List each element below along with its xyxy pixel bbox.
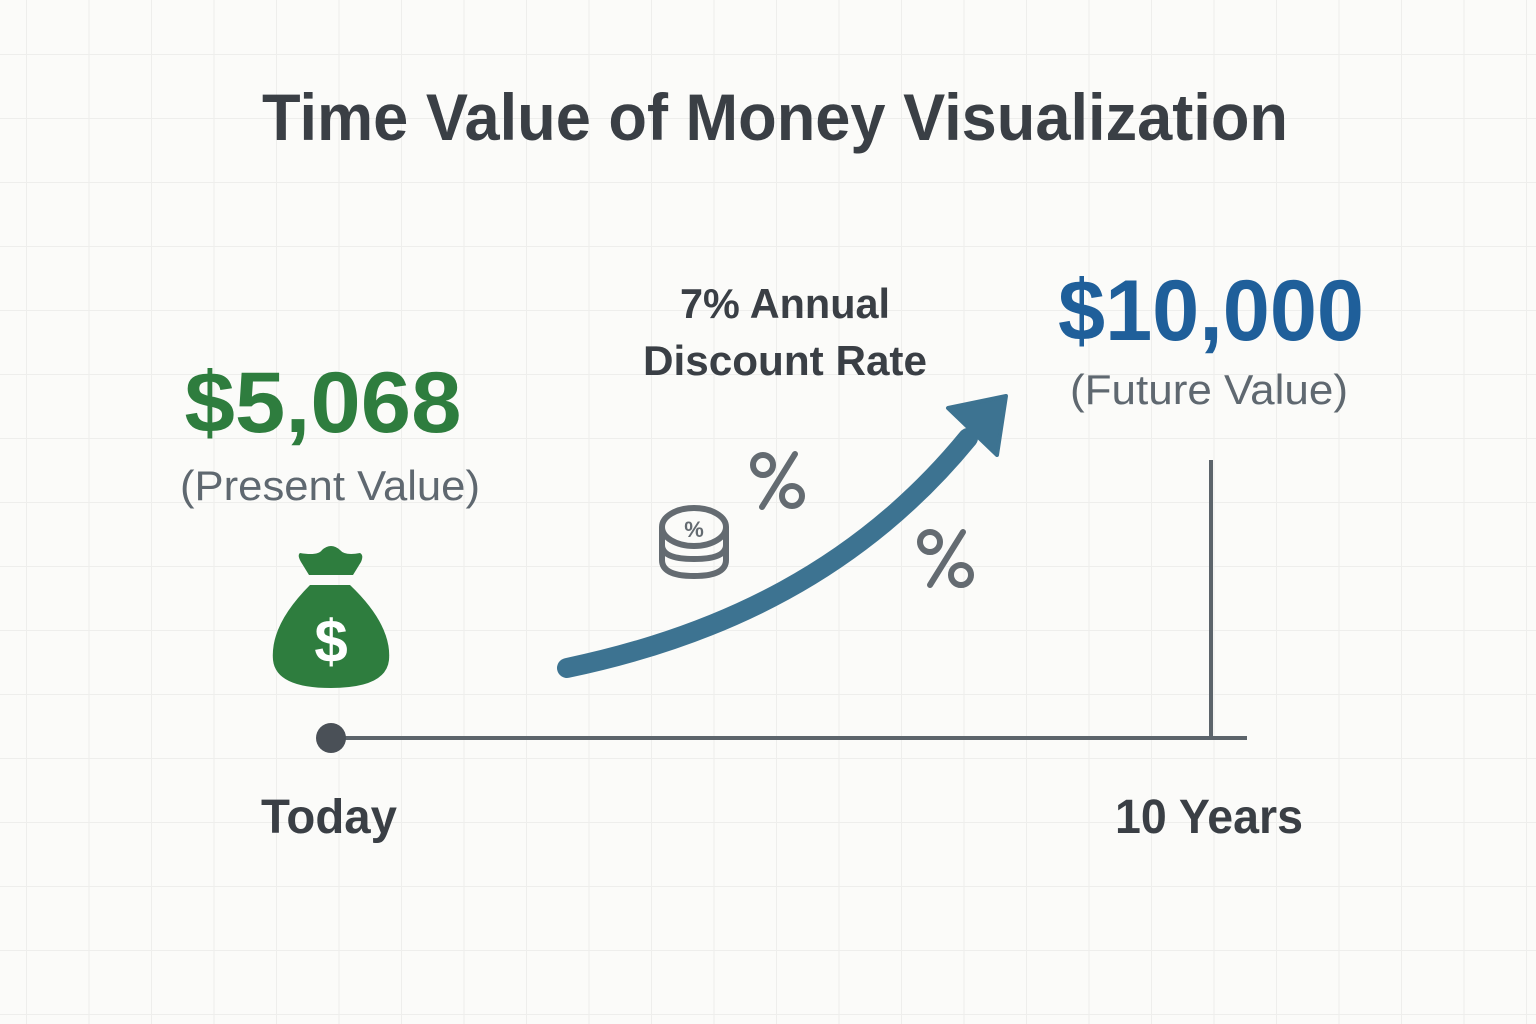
title: Time Value of Money Visualization [262,80,1288,154]
discount rate label: 7% Annual [680,280,890,327]
growth arrow [567,396,1006,668]
discount rate label: Discount Rate [643,337,927,384]
future value label: (Future Value) [1070,366,1348,413]
timeline [316,460,1247,753]
label: today: Today [261,791,397,844]
icon: coin stack [662,508,726,576]
discount rate label [643,280,927,384]
icon: percent sign lower [920,532,971,585]
icon: percent sign upper [753,454,802,507]
present value amount: $5,068 [184,355,462,451]
label: 10 years: 10 Years [1115,791,1303,844]
icon: money bag: $ [314,608,348,675]
future value amount: $10,000 [1058,263,1364,359]
icon: money bag [273,546,389,688]
present value label: (Present Value) [180,462,480,509]
icon: coin stack: % [684,517,704,542]
